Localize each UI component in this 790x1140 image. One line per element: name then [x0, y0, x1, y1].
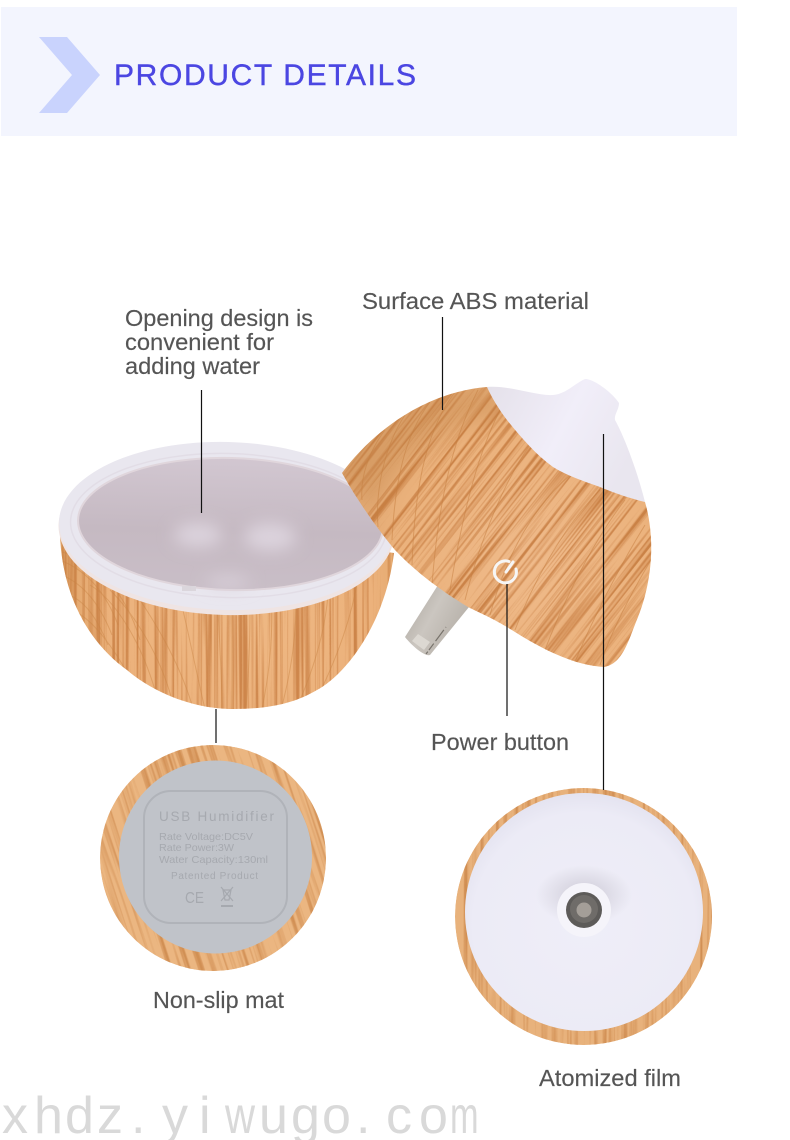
embossed specifications: CE [185, 890, 204, 907]
label: power button: Power button [431, 729, 569, 755]
embossed rounded frame [144, 791, 287, 923]
open bowl: lower half of humidifier [55, 438, 400, 715]
wood ring [100, 745, 326, 971]
watermark [2, 1086, 479, 1140]
embossed specifications: Water Capacity:130ml [159, 854, 268, 866]
nozzle opening [557, 883, 611, 937]
label: surface material: Surface ABS material [362, 288, 589, 314]
dome wood shell [342, 387, 652, 667]
top view: atomized film [450, 785, 717, 1050]
grey mat [119, 760, 312, 954]
icon: power button [494, 561, 516, 583]
bowl wood shell [60, 537, 394, 709]
embossed specifications: Rate Power:3W [159, 842, 234, 854]
label: atomized film: Atomized film [539, 1065, 681, 1091]
white disc [465, 793, 703, 1031]
water tube [405, 585, 469, 655]
heading: product details: PRODUCT DETAILS [114, 59, 416, 92]
embossed specifications: Patented Product [171, 871, 258, 882]
label: opening design: Opening design is [125, 305, 313, 331]
bowl interior [76, 454, 385, 594]
label: opening design [125, 305, 313, 379]
label: opening design: adding water [125, 353, 260, 379]
wood ring [450, 785, 717, 1050]
icon: crossed-out bin [221, 887, 233, 906]
white cap with nozzle [487, 379, 645, 502]
interior highlights [174, 523, 296, 587]
icon: chevron [39, 37, 100, 113]
embossed specifications: Rate Voltage:DC5V [159, 831, 253, 843]
label: opening design: convenient for [125, 329, 274, 355]
white rim [56, 439, 397, 619]
header band [1, 7, 737, 136]
rim notch [182, 586, 196, 591]
base view: non-slip mat [100, 745, 326, 971]
leader lines [202, 317, 604, 790]
embossed specifications [159, 809, 274, 907]
dome: upper half of humidifier [342, 379, 652, 667]
label: non-slip mat: Non-slip mat [153, 987, 285, 1013]
embossed specifications: USB Humidifier [159, 809, 274, 824]
